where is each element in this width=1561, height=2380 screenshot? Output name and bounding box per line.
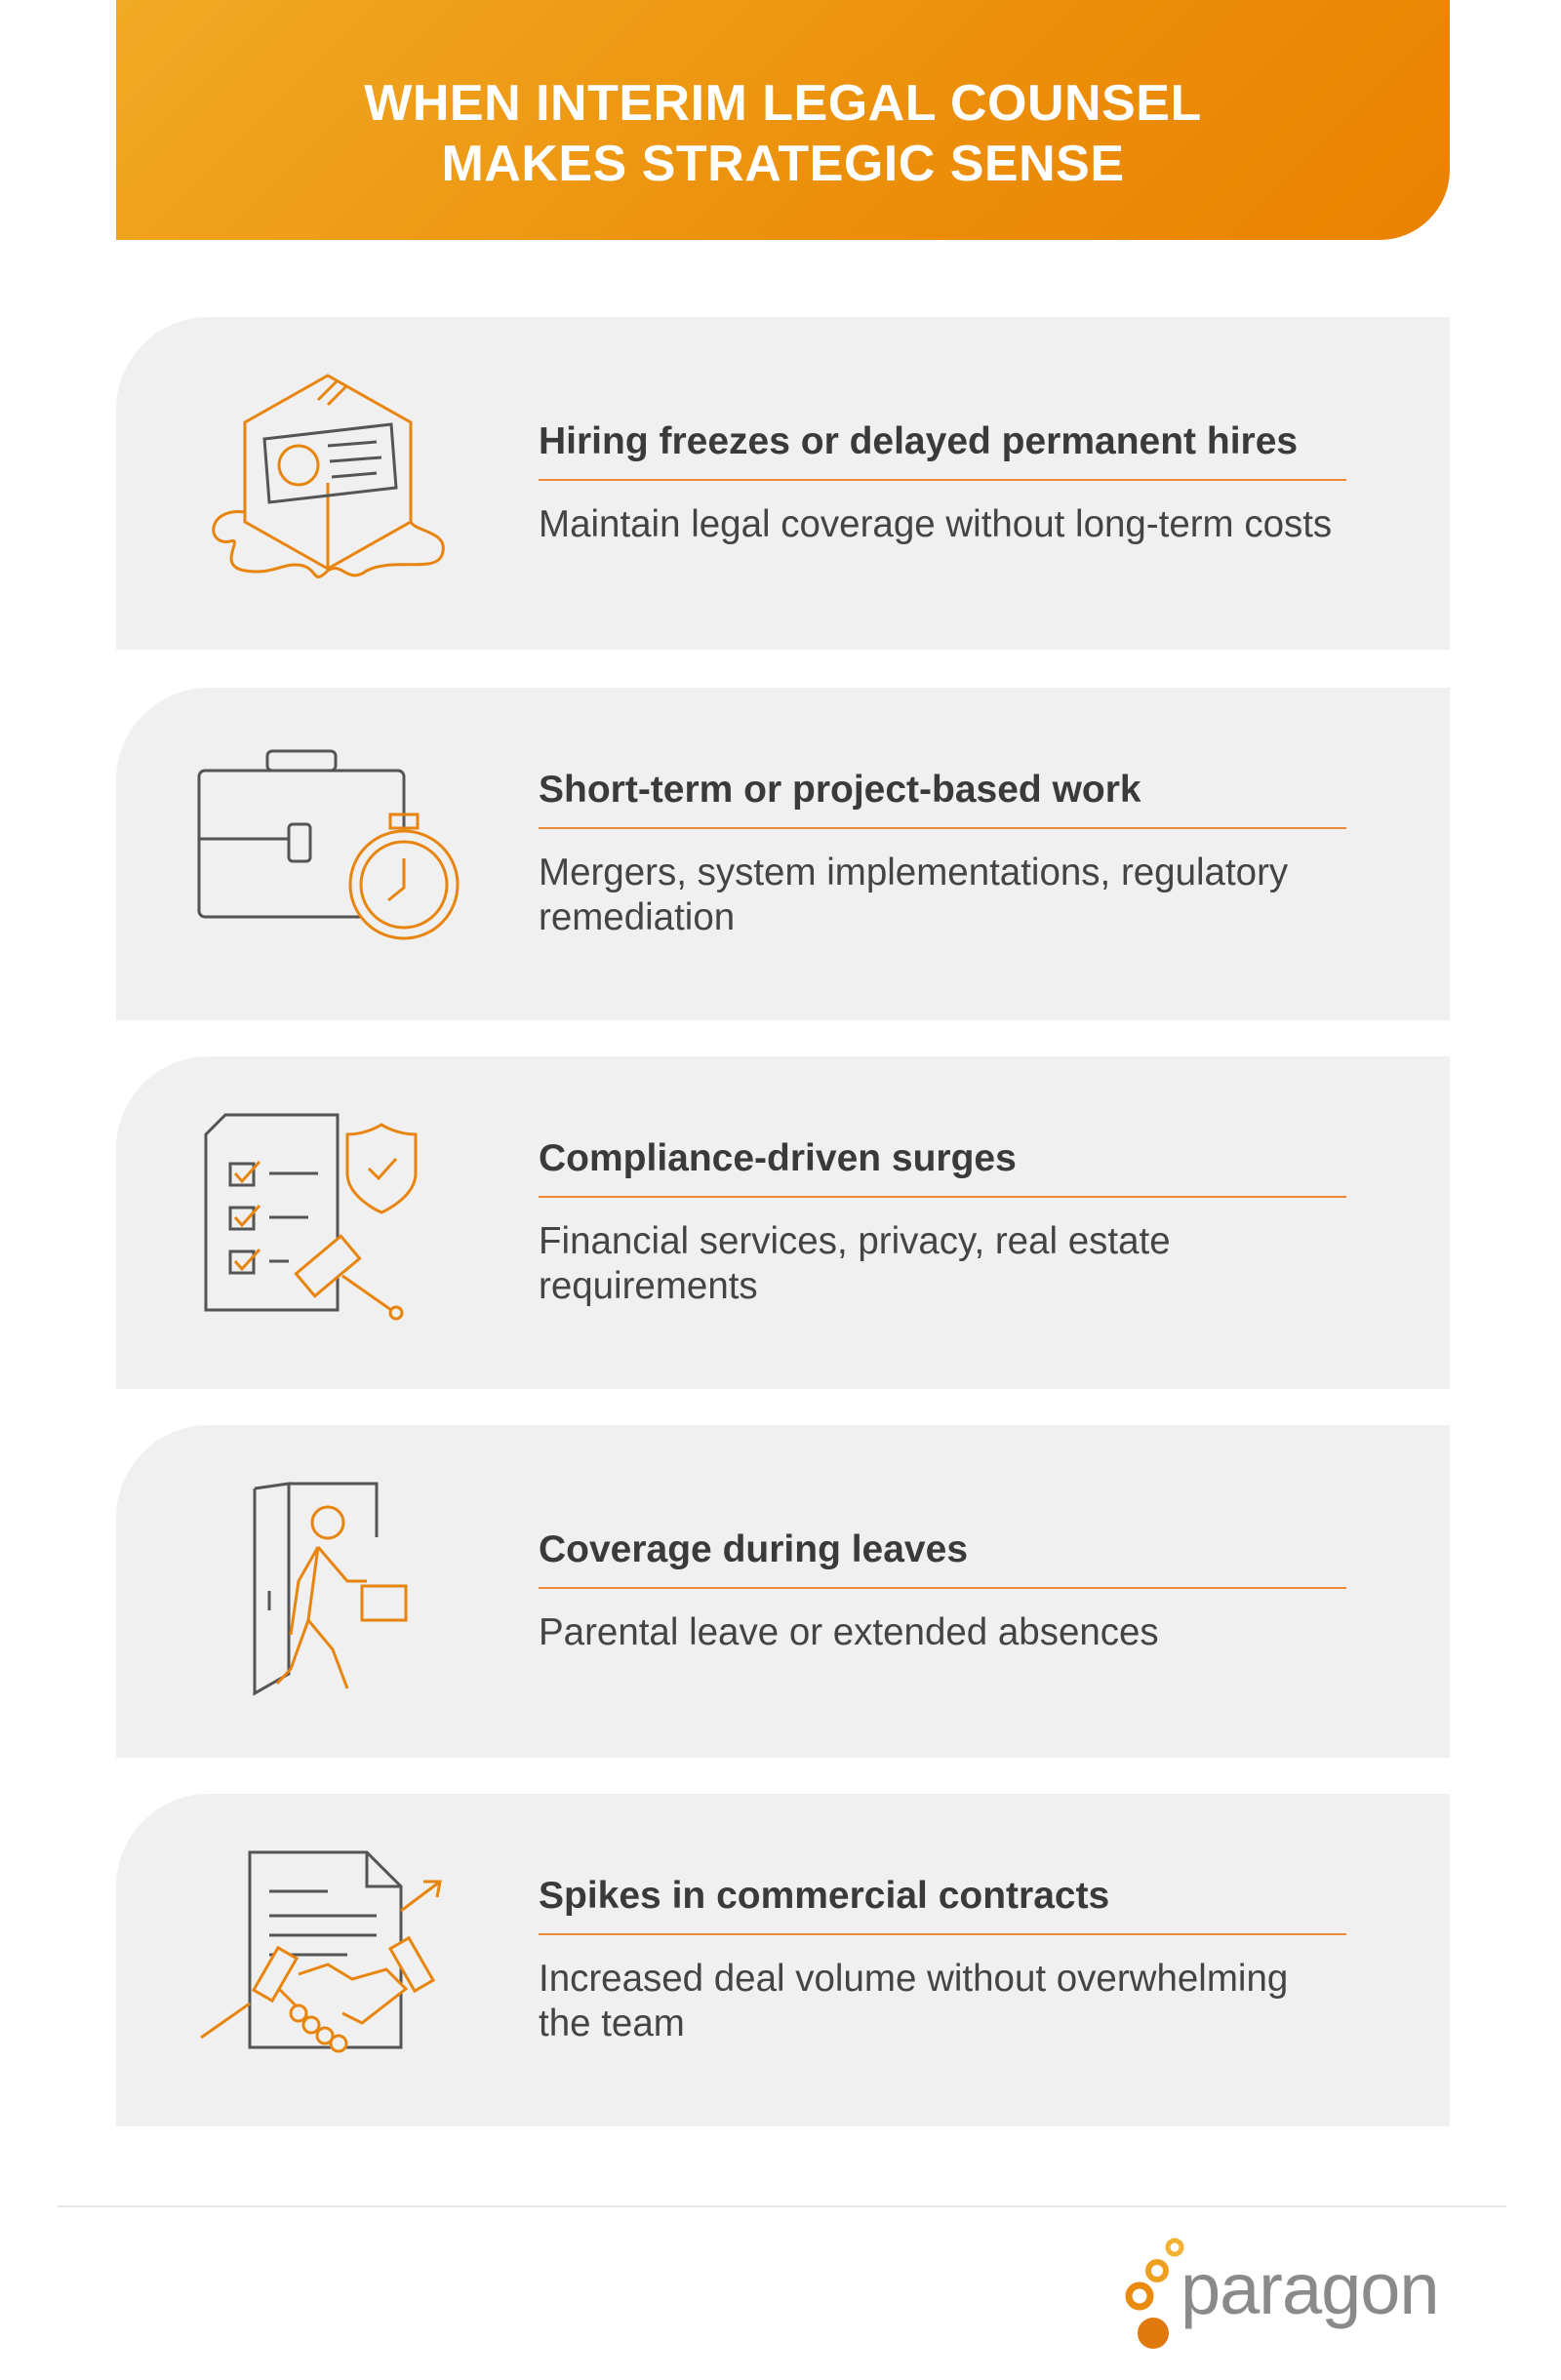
icon: checklist shield gavel	[205, 1114, 418, 1321]
description: Mergers, system implementations, regulatory remediation	[539, 851, 1288, 938]
icon: document handshake	[200, 1851, 442, 2052]
title: WHEN INTERIM LEGAL COUNSEL	[364, 75, 1202, 132]
icon: person leaving door	[254, 1482, 408, 1696]
logo: paragon	[1126, 2238, 1439, 2349]
heading: Short-term or project-based work	[539, 769, 1141, 810]
title	[116, 0, 1450, 240]
heading	[539, 1875, 1346, 1935]
heading: Spikes in commercial contracts	[539, 1875, 1109, 1916]
icon: briefcase and stopwatch	[197, 749, 459, 940]
heading	[539, 769, 1346, 829]
logo: paragon: paragon	[1181, 2248, 1439, 2329]
panel: short-term work	[116, 688, 1450, 1020]
icon: id card cube	[212, 374, 445, 578]
description: Increased deal volume without overwhelming the team	[539, 1957, 1288, 2044]
panel: compliance	[116, 1056, 1450, 1389]
title: MAKES STRATEGIC SENSE	[441, 136, 1125, 192]
panel: commercial contracts	[116, 1794, 1450, 2126]
description: Financial services, privacy, real estate requirements	[539, 1219, 1171, 1307]
heading: Hiring freezes or delayed permanent hires	[539, 419, 1298, 462]
heading	[539, 1527, 1346, 1588]
description: Maintain legal coverage without long-term costs	[539, 503, 1332, 544]
description: Parental leave or extended absences	[539, 1611, 1159, 1652]
panel: coverage during leaves	[116, 1425, 1450, 1758]
heading: Compliance-driven surges	[539, 1137, 1017, 1178]
heading	[539, 419, 1346, 480]
heading: Coverage during leaves	[539, 1527, 968, 1570]
heading	[539, 1137, 1346, 1198]
panel: hiring freezes	[116, 317, 1450, 650]
